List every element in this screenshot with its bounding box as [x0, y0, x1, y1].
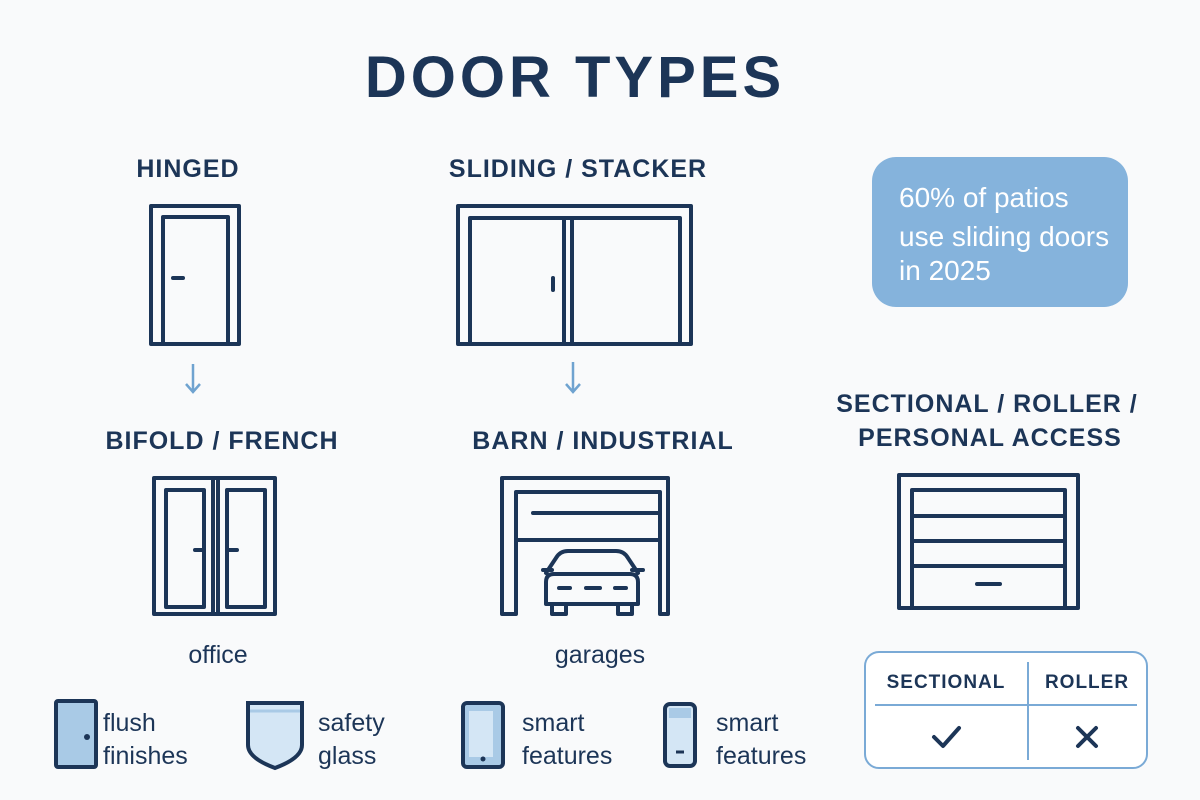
item: smart features tablet [463, 703, 612, 770]
item: safety glass [248, 703, 385, 770]
heading: sectional: SECTIONAL / ROLLER / [836, 390, 1138, 418]
heading: hinged: HINGED [136, 155, 240, 183]
arrow: hinged to bifold [186, 364, 200, 392]
item: flush finishes: flush [103, 709, 156, 737]
icon: sectional garage door [899, 475, 1078, 608]
item: smart features tablet: smart [522, 709, 585, 737]
comparison table: SECTIONAL [887, 672, 1005, 693]
label: office: office [188, 641, 248, 669]
heading: sectional [836, 390, 1138, 452]
heading: sliding: SLIDING / STACKER [449, 155, 707, 183]
title: DOOR TYPES [365, 45, 785, 110]
item: safety glass: glass [318, 742, 376, 770]
icon: hinged door [151, 206, 239, 344]
comparison table [865, 652, 1147, 768]
item: smart features phone [665, 704, 806, 770]
heading: barn: BARN / INDUSTRIAL [472, 427, 734, 455]
item: flush finishes: finishes [103, 742, 188, 770]
item: smart features phone: smart [716, 709, 779, 737]
item: flush finishes [56, 701, 188, 770]
heading: bifold: BIFOLD / FRENCH [105, 427, 339, 455]
icon: sliding door [458, 206, 691, 344]
heading: sectional: PERSONAL ACCESS [858, 424, 1122, 452]
item: smart features phone: features [716, 742, 806, 770]
callout: patios stat: use sliding doors [899, 221, 1109, 252]
item: smart features tablet: features [522, 742, 612, 770]
icon: garage with car [502, 478, 668, 614]
icon: french door [154, 478, 275, 614]
label: garages: garages [555, 641, 645, 669]
arrow: sliding to barn [566, 362, 580, 392]
callout: patios stat [872, 157, 1128, 307]
callout: patios stat: in 2025 [899, 255, 991, 286]
callout: patios stat: 60% of patios [899, 182, 1069, 213]
item: safety glass: safety [318, 709, 385, 737]
comparison table: ROLLER [1045, 672, 1129, 693]
